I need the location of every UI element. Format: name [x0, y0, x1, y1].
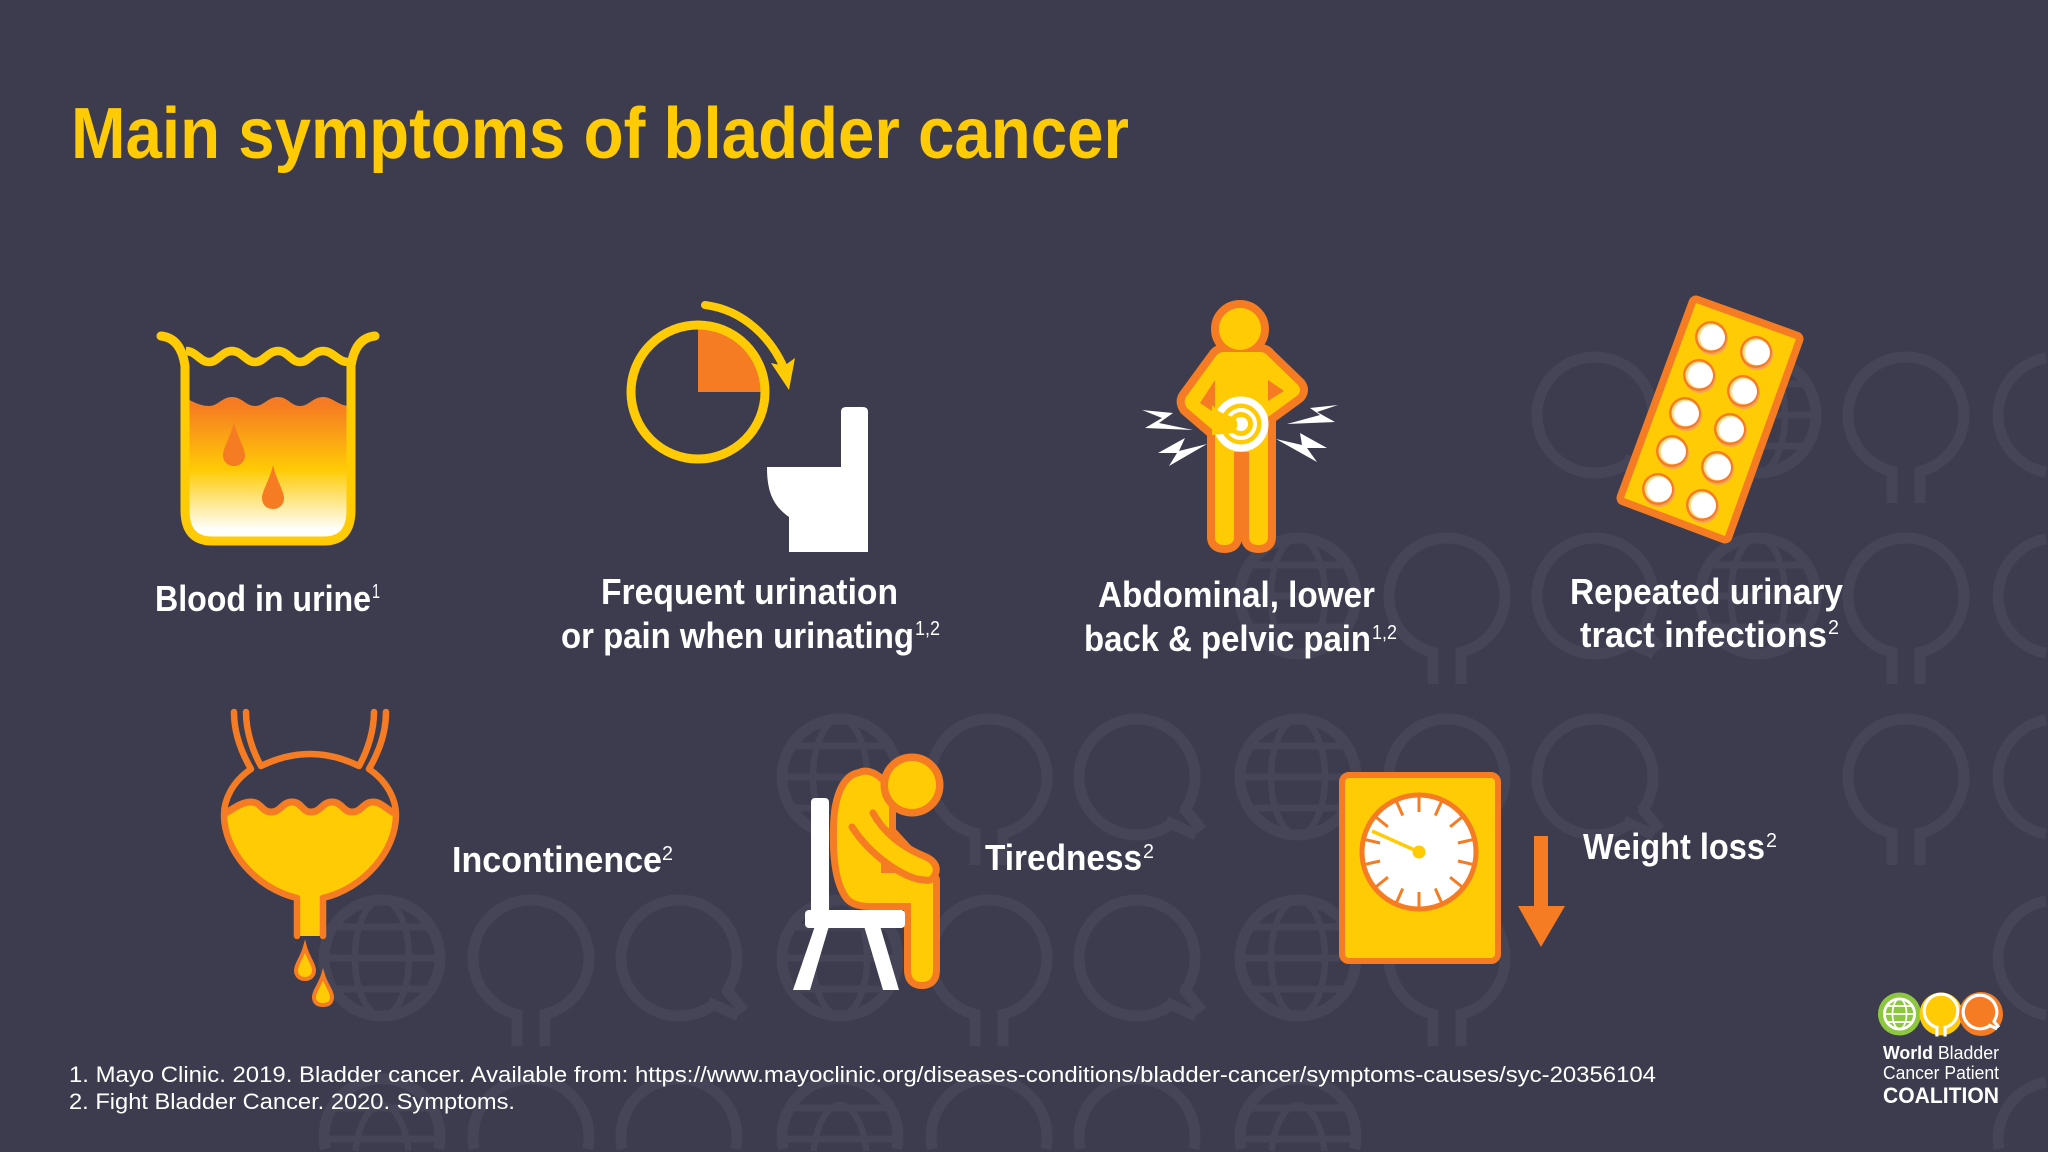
- label: blood in urine: Blood in urine: [155, 578, 371, 619]
- icon: weighing scale: [1342, 775, 1498, 961]
- logo wordmark: [1883, 1043, 1999, 1108]
- logo wordmark: Cancer Patient: [1883, 1063, 1999, 1083]
- icon: person with abdominal pain: [1185, 308, 1300, 545]
- background pattern of globe, balloon and speech icons: [324, 357, 2046, 1151]
- panel: weight loss: [1342, 775, 1777, 961]
- footnotes: [69, 1062, 1656, 1114]
- arrow: downward: [1518, 836, 1565, 947]
- label: repeated urinary tract infections: 2: [1828, 617, 1839, 639]
- icon: beaker with blood-tinted urine: [161, 336, 375, 541]
- label: abdominal pain: 1,2: [1372, 622, 1397, 644]
- icon: bladder leaking: [224, 712, 396, 1005]
- label: tiredness: 2: [1143, 841, 1154, 863]
- label: tiredness: Tiredness: [985, 837, 1142, 878]
- label: incontinence: Incontinence: [452, 839, 662, 880]
- logo: World Bladder Cancer Patient Coalition: [1878, 992, 2003, 1108]
- label: abdominal pain: back & pelvic pain: [1084, 618, 1371, 659]
- label: weight loss: 2: [1766, 830, 1777, 852]
- panel: repeated urinary tract infections: [1570, 303, 1843, 655]
- logo wordmark: COALITION: [1883, 1083, 1999, 1108]
- panel: incontinence: [224, 712, 673, 1005]
- label: frequent urination: 1,2: [915, 618, 940, 640]
- label: abdominal pain: Abdominal, lower: [1098, 574, 1375, 615]
- icon: pain bolts: [1142, 405, 1338, 466]
- label: weight loss: Weight loss: [1583, 826, 1765, 867]
- label: incontinence: 2: [662, 843, 673, 865]
- footnotes: 2. Fight Bladder Cancer. 2020. Symptoms.: [69, 1089, 515, 1114]
- label: repeated urinary tract infections: Repeated urinary: [1570, 571, 1843, 612]
- panel: abdominal pain: [1084, 308, 1397, 659]
- logo wordmark: World Bladder: [1883, 1043, 1999, 1063]
- icon: toilet: [767, 407, 868, 552]
- title: Main symptoms of bladder cancer: [71, 94, 1129, 174]
- label: blood in urine: 1: [372, 581, 380, 603]
- panel: tiredness: [793, 761, 1154, 990]
- icon: tired person on a chair: [793, 761, 936, 990]
- label: frequent urination: Frequent urination: [601, 571, 898, 612]
- footnotes: 1. Mayo Clinic. 2019. Bladder cancer. Available from: https://www.mayoclinic.org/diseases-conditions/bladder-cancer/symptoms-causes/syc-20356104: [69, 1062, 1656, 1087]
- label: frequent urination: or pain when urinating: [561, 615, 914, 656]
- label: repeated urinary tract infections: tract infections: [1580, 614, 1827, 655]
- icon: blister pack: [1624, 303, 1796, 536]
- icon: clock with rotation arrow: [631, 305, 795, 459]
- logo icons: [1878, 992, 2003, 1037]
- panel: blood in urine: [155, 336, 380, 619]
- label: frequent urination: [561, 571, 940, 656]
- panel: frequent urination: [561, 305, 940, 656]
- label: repeated urinary tract infections: [1570, 571, 1843, 655]
- label: abdominal pain: [1084, 574, 1397, 659]
